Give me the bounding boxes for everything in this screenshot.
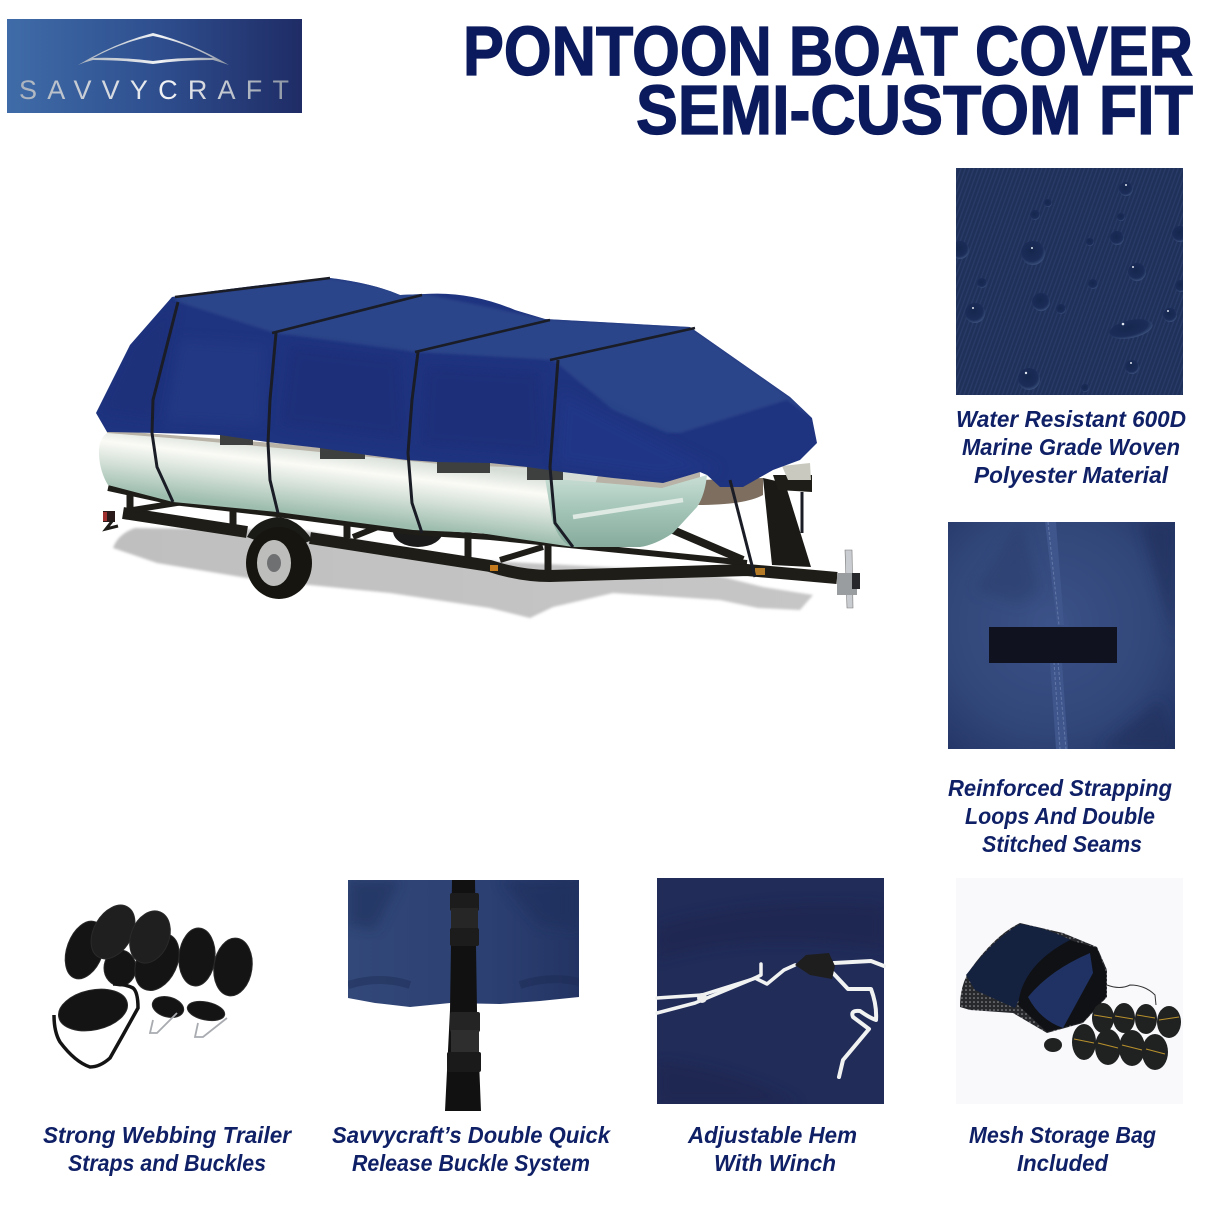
main photo: covered pontoon boat on trailer [90,270,860,618]
caption: trailer straps [43,1122,292,1176]
packed straps [1044,1003,1181,1070]
caption: water resistant: Polyester Material [974,462,1169,488]
coupler jack [845,550,853,608]
caption: reinforced strapping: Stitched Seams [982,831,1142,857]
upper buckle [450,893,479,911]
winch block [795,953,835,979]
caption: trailer straps: Straps and Buckles [68,1150,266,1176]
caption: mesh storage bag: Included [1017,1150,1109,1176]
water droplets [951,182,1188,392]
deck openings [220,435,563,480]
rope [657,961,884,1077]
photo: adjustable hem with winch [657,878,884,1104]
caption: buckle system: Savvycraft’s Double Quick [332,1122,611,1148]
caption: trailer straps: Strong Webbing Trailer [43,1122,292,1148]
cover roof and bow panel [172,278,812,433]
caption: water resistant: Marine Grade Woven [962,434,1180,460]
trailer frame [108,488,837,578]
bow section behind hull [697,478,763,505]
photo: double quick release buckle [348,880,579,1111]
caption: adjustable hem [687,1122,857,1176]
panel: reinforced strapping loop [948,522,1175,749]
logo: Savvycraft [7,19,302,113]
caption: water resistant [956,406,1186,488]
amber markers [490,565,498,571]
caption: mesh storage bag: Mesh Storage Bag [969,1122,1156,1148]
photo: webbing trailer straps [54,897,256,1067]
photo: mesh storage bag [956,878,1183,1104]
caption: adjustable hem: With Winch [714,1150,836,1176]
logo: Savvycraft: SAVVYCRAFT [19,75,289,105]
pontoon hull [99,433,600,547]
lower buckle [450,1012,480,1032]
caption: adjustable hem: Adjustable Hem [687,1122,857,1148]
strap [445,880,481,1111]
pontoon nose [545,475,707,547]
boat cover [90,270,825,495]
far wheel [393,515,443,547]
caption: buckle system [332,1122,611,1176]
drawcord [1107,985,1156,1005]
panel: water resistant fabric [951,168,1188,395]
caption: reinforced strapping [948,775,1172,857]
caption: reinforced strapping: Loops And Double [965,803,1155,829]
winch post [763,478,811,567]
ground shadow [113,528,813,618]
tail light [103,511,118,529]
caption: water resistant: Water Resistant 600D [956,406,1186,432]
roof and side straps [152,278,802,577]
caption: reinforced strapping: Reinforced Strapping [948,775,1172,801]
mesh bag [960,923,1107,1033]
black strapping loop [989,627,1117,663]
caption: buckle system: Release Buckle System [352,1150,590,1176]
deck band [107,430,700,492]
title [463,12,1193,149]
near wheel [246,517,312,599]
folded cover [1028,953,1093,1028]
caption: mesh storage bag [969,1122,1156,1176]
